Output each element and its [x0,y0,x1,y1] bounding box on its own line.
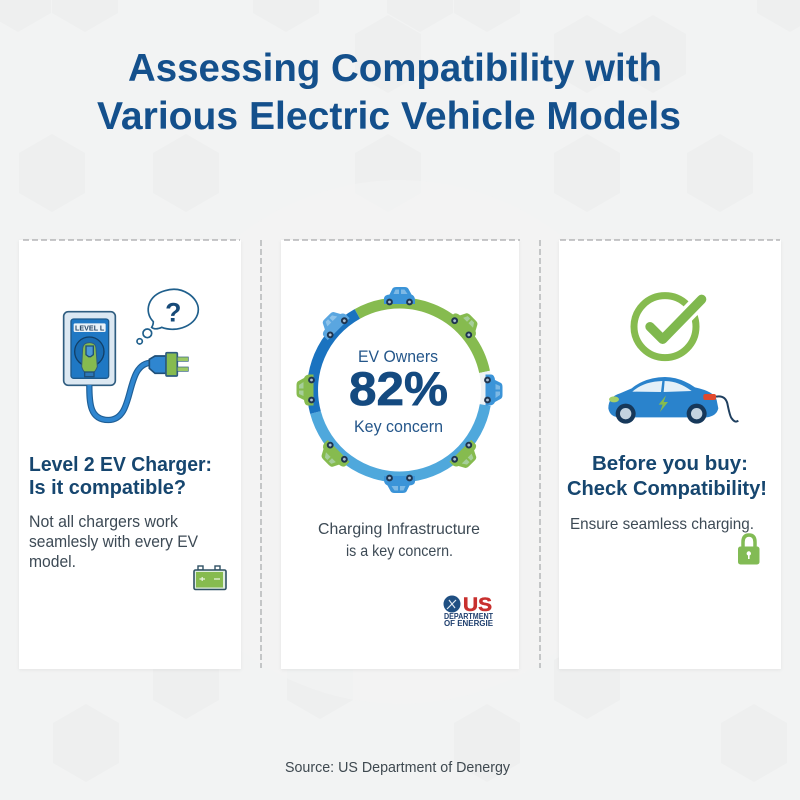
source: Source: US Department of Denergy [285,760,511,776]
statistic: 82 percent: 82% [349,362,448,415]
icon: question thought bubble: ? [165,298,181,328]
heading: level 2 charger: Level 2 EV Charger: [29,453,212,476]
icon: padlock [738,535,760,564]
icon: charger with plug: LEVEL L [75,325,105,332]
dashed dividers [23,240,780,668]
logo: US Department of Energy: OF ENERGIE [444,619,494,628]
title: Various Electric Vehicle Models [97,95,681,138]
icon: cars around ring [296,287,502,493]
heading: before you buy: Before you buy: [592,452,748,475]
text: charger note: seamlesly with every EV [29,533,198,551]
title: Assessing Compatibility with [128,47,662,90]
icon: check mark [634,296,702,358]
title [97,47,681,138]
text: infrastructure note [318,521,480,560]
heading: before you buy [567,452,767,500]
text: infrastructure note: Charging Infrastructure [318,521,480,538]
panel: EV owners statistic [281,240,519,669]
logo: US Department of Energy [444,595,494,628]
text: infrastructure note: is a key concern. [346,543,453,560]
heading: level 2 charger [29,453,212,499]
text: charger note: Not all chargers work [29,513,179,531]
statistic: 82 percent [349,348,448,436]
chart: donut ring [296,287,502,493]
icon: charger with plug [64,289,198,420]
statistic: 82 percent: EV Owners [358,348,438,366]
text: charger note: model. [29,553,76,571]
text: charger note [29,513,198,571]
icon: electric car charging [608,377,738,424]
logo: US Department of Energy: DEPARTMENT [444,612,493,621]
panel: charger compatibility [19,240,241,669]
heading: level 2 charger: Is it compatible? [29,476,186,499]
icon: battery [194,566,226,590]
statistic: 82 percent: Key concern [354,418,443,436]
logo: US Department of Energy: US [463,595,492,616]
text: seamless charging: Ensure seamless charging. [570,516,754,533]
heading: before you buy: Check Compatibility! [567,477,767,500]
panel: before you buy [559,240,781,669]
